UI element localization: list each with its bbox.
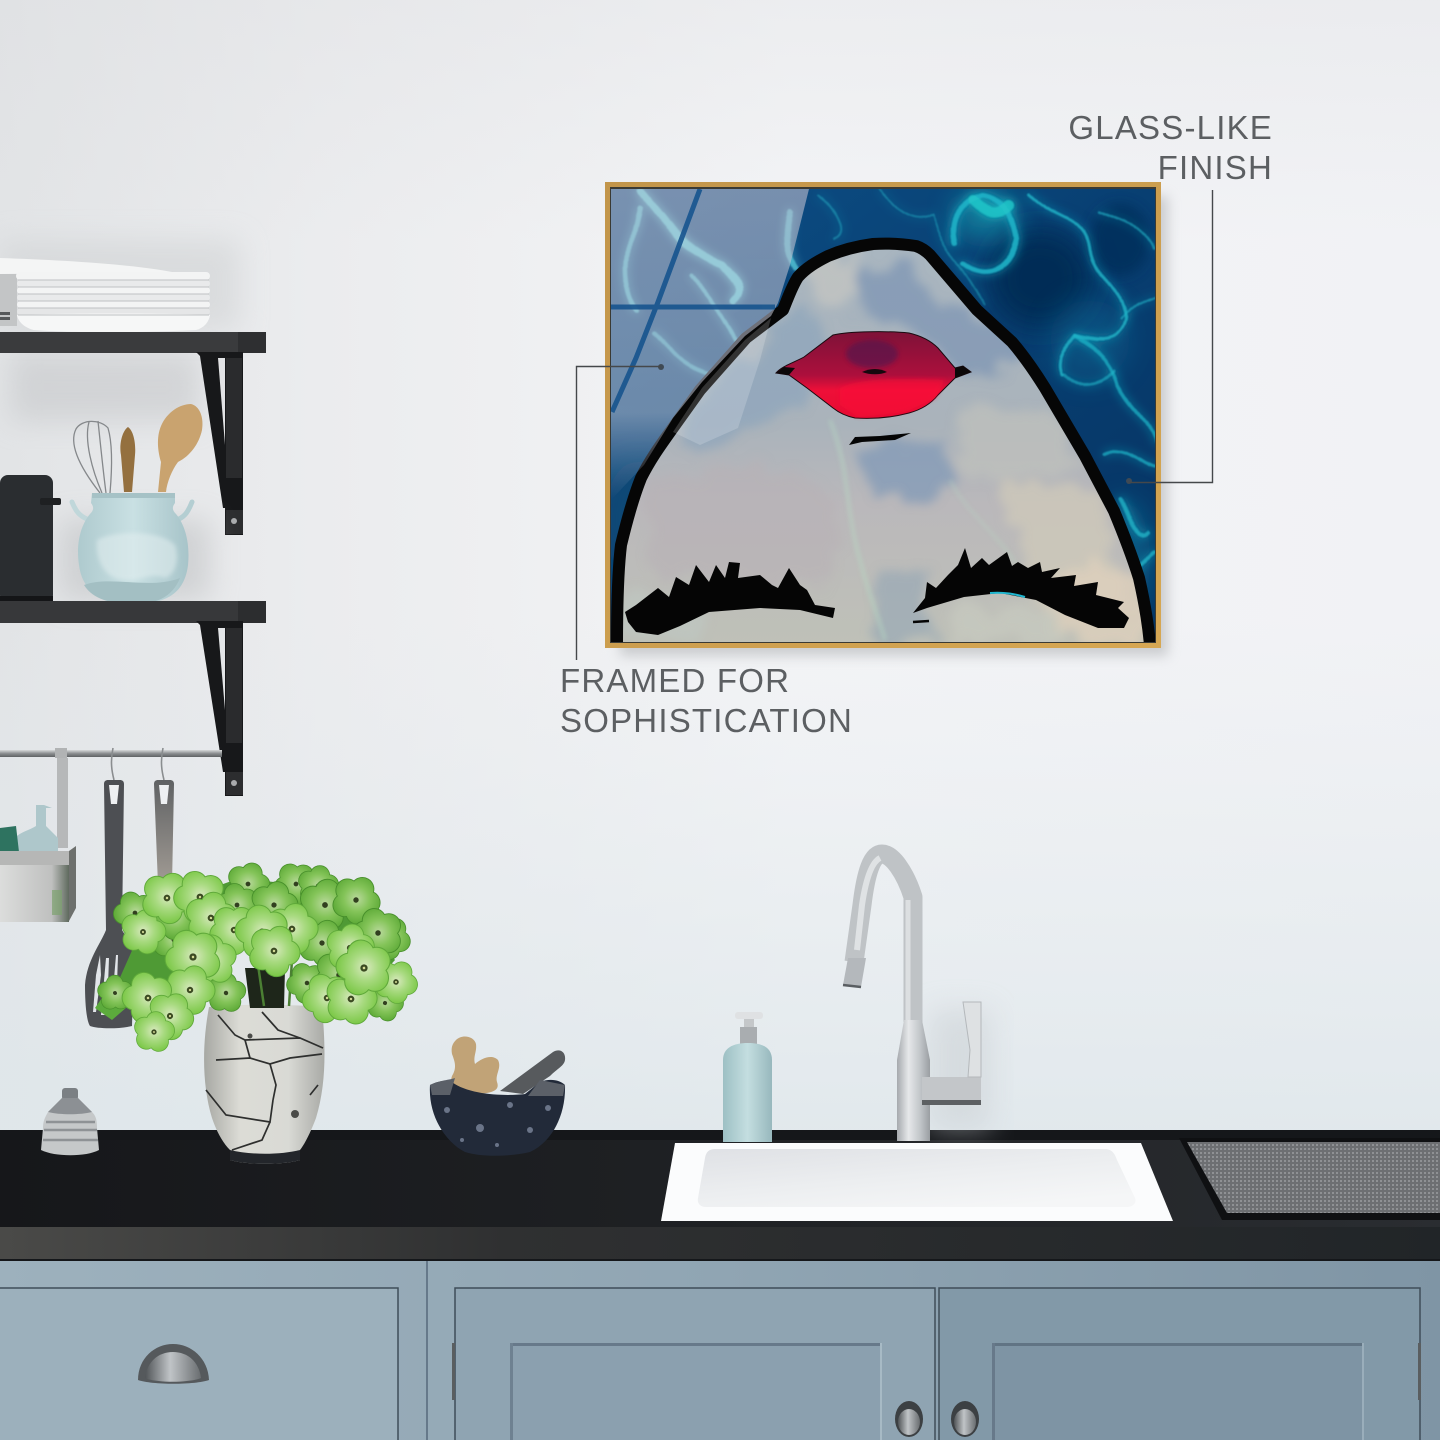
wall art frame xyxy=(604,182,1168,656)
door: left of pair xyxy=(455,1288,935,1440)
icon: spatula xyxy=(85,748,134,1028)
left cabinet door xyxy=(0,1288,398,1440)
face mottling xyxy=(681,253,1144,642)
upper shelf board xyxy=(0,332,266,353)
left eyelashes xyxy=(625,562,835,635)
icon: pestle xyxy=(500,1050,565,1094)
icon: whisk xyxy=(74,421,112,493)
callout: glass-like finish: GLASS-LIKE xyxy=(1068,109,1273,146)
nose shadow xyxy=(849,433,911,445)
shelf items: utensil jar and canister xyxy=(0,404,210,604)
faucet xyxy=(843,854,990,1141)
icon: ceramic jar xyxy=(72,493,192,604)
glare highlight on face xyxy=(673,318,771,445)
window reflection lines xyxy=(611,189,775,412)
icon: cup pull handle xyxy=(138,1344,209,1384)
callout: framed for sophistication: SOPHISTICATION xyxy=(560,702,853,739)
glass glare xyxy=(611,189,809,500)
callout: glass-like finish xyxy=(1068,109,1273,484)
lower shelf xyxy=(0,601,266,796)
wall background xyxy=(0,0,1440,1140)
icon: stone bowl xyxy=(430,1078,565,1156)
icon: knob xyxy=(951,1401,979,1437)
callout: framed for sophistication: FRAMED FOR xyxy=(560,662,790,699)
icon: ginger xyxy=(451,1037,499,1094)
icon: knob xyxy=(895,1401,923,1437)
door: right of pair xyxy=(939,1288,1420,1440)
small ceramic jar xyxy=(41,1088,99,1155)
rail with hanging utensils xyxy=(0,748,222,1028)
counter top xyxy=(0,1130,1440,1261)
callout: framed for sophistication xyxy=(560,364,853,739)
icon: large wooden spoon xyxy=(158,404,203,492)
mortar and ginger xyxy=(430,1037,565,1156)
cracked stone vase xyxy=(204,1005,324,1164)
soap dispenser xyxy=(723,1012,772,1142)
plant xyxy=(94,854,425,1054)
icon: dark canister xyxy=(0,475,61,603)
water caustics xyxy=(820,190,1155,570)
icon: stack of plates xyxy=(0,258,210,332)
face shape xyxy=(617,244,1150,645)
lips xyxy=(776,332,971,418)
dish mat xyxy=(1179,1138,1440,1220)
icon: small wooden spoon xyxy=(120,427,135,492)
hanging basket with toiletries xyxy=(0,805,76,922)
sink xyxy=(661,1143,1173,1221)
artwork xyxy=(604,189,1155,645)
cabinets xyxy=(0,1261,1440,1440)
icon: hanging server xyxy=(154,748,174,885)
shelf unit: upper shelf with plates xyxy=(0,240,266,535)
callout: glass-like finish: FINISH xyxy=(1158,149,1273,186)
upper shelf bracket xyxy=(196,352,243,535)
face outline xyxy=(617,244,1150,645)
caustics below the glare xyxy=(628,195,795,370)
right eyelashes xyxy=(913,548,1129,628)
